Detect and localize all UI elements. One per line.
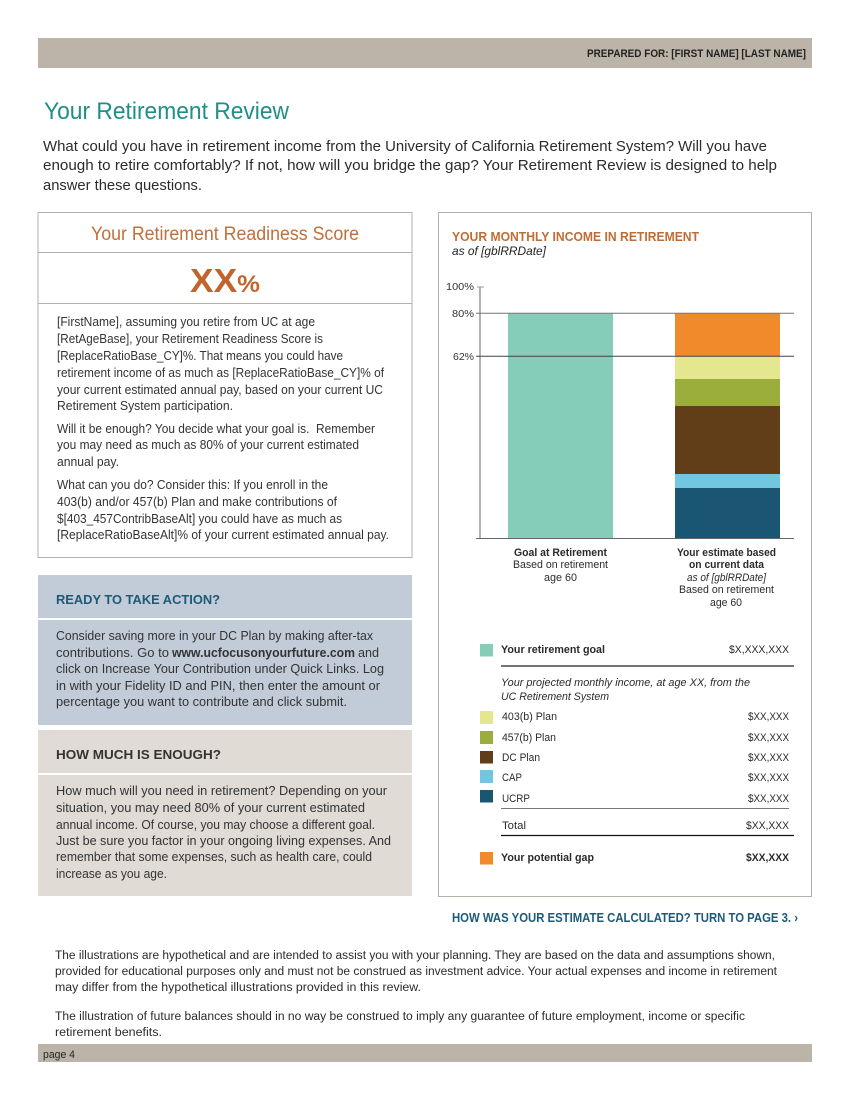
estimate bar label [677, 547, 776, 609]
legend: potential gap: $XX,XXX [746, 852, 790, 864]
legend: UCRP: UCRP [502, 793, 530, 805]
header bar: PREPARED FOR: [FIRST NAME] [LAST NAME] [587, 48, 806, 60]
action text: contributions. Go to [56, 646, 169, 660]
legend: retirement goal: $X,XXX,XXX [729, 644, 790, 656]
estimate bar label: Based on retirement [679, 584, 774, 596]
estimate bar label: on current data [689, 559, 765, 571]
legend: 403(b) plan [480, 711, 790, 724]
estimate stacked bar [675, 313, 780, 538]
enough text: Just be sure you factor in your ongoing living expenses. And [56, 834, 391, 848]
axis labels [446, 282, 474, 363]
score explanation text: 403(b) and/or 457(b) Plan and make contributions of [57, 495, 338, 509]
goal bar label: Based on retirement [513, 559, 608, 571]
intro text: enough to retire comfortably? If not, how will you bridge the gap? Your Retirement Review is designed to help [43, 158, 777, 174]
score explanation text: Will it be enough? You decide what your goal is. Remember [57, 422, 375, 436]
score heading: Your Retirement Readiness Score [91, 224, 359, 245]
legend note: Your projected monthly income, at age XX, from the [501, 677, 750, 689]
legend: retirement goal [480, 644, 790, 656]
enough heading: HOW MUCH IS ENOUGH? [56, 747, 221, 762]
action text [56, 629, 384, 709]
score explanation text: [FirstName], assuming you retire from UC at age [57, 315, 315, 329]
score explanation text: annual pay. [57, 455, 119, 469]
legend note: UC Retirement System [501, 691, 609, 703]
footer bar: page 4 [43, 1049, 75, 1061]
estimate bar label: Your estimate based [677, 547, 776, 559]
score explanation text: What can you do? Consider this: If you enroll in the [57, 478, 328, 492]
goal bar [508, 313, 613, 538]
panel: ready to take action [38, 575, 412, 725]
header bar [38, 38, 812, 68]
enough text [56, 784, 391, 881]
goal bar label: Goal at Retirement [514, 547, 607, 559]
legend: 403(b) plan: $XX,XXX [748, 711, 790, 723]
legend: total: Total [502, 820, 526, 832]
legend: CAP [480, 770, 790, 784]
panel: how much is enough [38, 730, 412, 896]
enough text: situation, you may need 80% of your current estimated [56, 801, 365, 815]
score explanation text: [ReplaceRatioBase_CY]%. That means you could have [57, 349, 343, 363]
enough text: remember that some expenses, such as health care, could [56, 850, 372, 864]
chart heading: as of [gblRRDate] [452, 244, 547, 258]
legend: UCRP [480, 790, 790, 805]
callout: estimate calculation link: HOW WAS YOUR ESTIMATE CALCULATED? TURN TO PAGE 3. › [452, 911, 798, 925]
score explanation text: [ReplaceRatioBaseAlt]% of your current estimated annual pay. [57, 528, 389, 542]
action text: and [358, 646, 379, 660]
panel: retirement readiness score [38, 212, 412, 558]
score value: XX% [190, 262, 260, 299]
legend: total: $XX,XXX [746, 820, 790, 832]
enough text: increase as you age. [56, 867, 167, 881]
chart heading: YOUR MONTHLY INCOME IN RETIREMENT [452, 230, 699, 244]
action text: Consider saving more in your DC Plan by making after-tax [56, 629, 374, 643]
legend: UCRP: $XX,XXX [748, 793, 790, 805]
disclaimer text: provided for educational purposes only and must not be construed as investment advice. Your actual expenses and income in retirement [55, 966, 778, 978]
score explanation text: retirement income of as much as [ReplaceRatioBase_CY]% of [57, 366, 384, 380]
score explanation text: you may need as much as 80% of your current estimated [57, 438, 359, 452]
legend: 403(b) plan: 403(b) Plan [502, 711, 557, 723]
disclaimer text: may differ from the hypothetical illustrations provided in this review. [55, 982, 421, 994]
chart heading [452, 230, 699, 258]
legend: DC plan [480, 751, 790, 764]
action text: click on Increase Your Contribution under Quick Links. Log [56, 662, 384, 676]
score explanation text: $[403_457ContribBaseAlt] you could have as much as [57, 512, 342, 526]
action heading: READY TO TAKE ACTION? [56, 592, 220, 607]
legend: 457(b) plan: $XX,XXX [748, 732, 790, 744]
score explanation text: [RetAgeBase], your Retirement Readiness Score is [57, 332, 323, 346]
footer bar [38, 1044, 812, 1062]
action text: www.ucfocusonyourfuture.com [171, 646, 355, 660]
enough text: annual income. Of course, you may choose a different goal. [56, 818, 375, 832]
intro text: What could you have in retirement income from the University of California Retirement System? Will you have [43, 139, 767, 155]
score explanation text: Retirement System participation. [57, 399, 233, 413]
legend: total [502, 820, 790, 832]
legend: CAP: $XX,XXX [748, 772, 790, 784]
estimate bar label: as of [gblRRDate] [687, 572, 767, 584]
action text: percentage you want to contribute and click submit. [56, 695, 347, 709]
estimate bar label: age 60 [710, 597, 742, 609]
axis labels: 80% [452, 309, 474, 320]
axis labels: 62% [453, 352, 474, 363]
action text: in with your Fidelity ID and PIN, then enter the amount or [56, 679, 380, 693]
score explanation text: your current estimated annual pay, based on your current UC [57, 383, 383, 397]
legend: 457(b) plan [480, 731, 790, 744]
legend: 457(b) plan: 457(b) Plan [502, 732, 556, 744]
score explanation text [57, 315, 389, 542]
goal bar label [513, 547, 608, 584]
legend: potential gap [480, 852, 790, 864]
legend note [501, 677, 750, 703]
legend: DC plan: DC Plan [502, 752, 540, 764]
title: Your Retirement Review [44, 98, 290, 125]
disclaimer text: The illustrations are hypothetical and are intended to assist you with your planning. They are based on the data and assumptions shown, [55, 950, 775, 962]
legend: DC plan: $XX,XXX [748, 752, 790, 764]
legend: potential gap: Your potential gap [501, 852, 594, 864]
disclaimer text [55, 950, 778, 1039]
axis labels: 100% [446, 282, 474, 293]
panel: monthly income in retirement [438, 212, 812, 896]
legend [480, 644, 794, 864]
intro text [43, 139, 777, 194]
legend: CAP: CAP [502, 772, 522, 784]
legend: retirement goal: Your retirement goal [501, 644, 605, 656]
goal bar label: age 60 [544, 572, 577, 584]
enough text: How much will you need in retirement? Depending on your [56, 784, 387, 798]
intro text: answer these questions. [43, 178, 202, 194]
bar chart [446, 282, 794, 609]
disclaimer text: retirement benefits. [55, 1027, 162, 1039]
disclaimer text: The illustration of future balances should in no way be construed to imply any guarantee of future employment, income or specific [55, 1011, 745, 1023]
